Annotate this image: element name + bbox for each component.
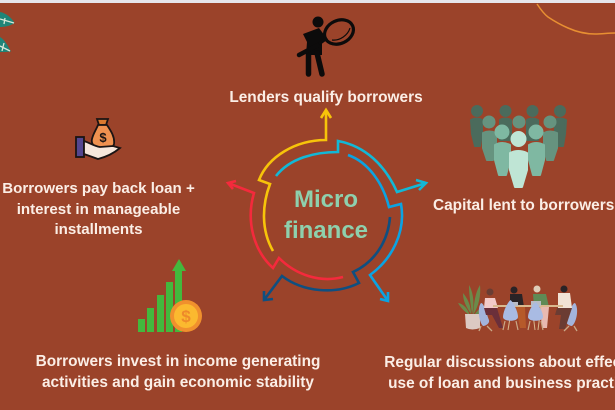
icon: bar chart with coin: $	[181, 307, 191, 326]
text: borrowers pay back loan	[2, 180, 195, 238]
text: borrowers invest: Borrowers invest in income generating	[36, 353, 320, 370]
yellow arrow	[259, 110, 331, 251]
back chairs	[479, 303, 489, 326]
text: borrowers pay back loan: interest in manageable	[17, 200, 180, 218]
back row of people	[471, 106, 566, 146]
central title: micro finance: Micro	[294, 186, 358, 213]
icon: hand holding money bag: $	[99, 130, 107, 145]
text: borrowers invest	[36, 353, 320, 390]
icon: person with magnifying glass	[296, 16, 356, 77]
front row of people	[495, 126, 544, 175]
text: capital lent to borrowers: Capital lent to borrowers	[433, 197, 614, 214]
text: borrowers pay back loan: installments	[54, 221, 143, 238]
front chairs	[503, 300, 518, 321]
heading: lenders qualify borrowers: Lenders qualify borrowers	[229, 89, 423, 106]
middle row of people	[483, 116, 557, 160]
central title: micro finance: finance	[284, 217, 368, 244]
icon: decorative teal leaves	[0, 12, 14, 52]
laptops	[509, 301, 541, 306]
light blue arrow	[348, 155, 402, 301]
pot	[465, 314, 480, 330]
text: borrowers invest: activities and gain economic stability	[42, 374, 314, 390]
icon: group of people	[470, 105, 567, 188]
dark blue arrow	[264, 217, 390, 300]
central title: micro finance	[284, 186, 368, 244]
decorative orange curve	[536, 4, 615, 35]
red arrow	[228, 181, 343, 279]
table	[493, 305, 563, 307]
plant	[458, 285, 484, 316]
text: borrowers pay back loan: Borrowers pay back loan +	[2, 180, 195, 197]
centre person	[510, 132, 527, 187]
people	[484, 286, 572, 329]
cyan arrow	[276, 141, 426, 192]
icon: team meeting at table	[458, 285, 578, 332]
icon: bar chart with coin	[138, 259, 202, 332]
icon: hand holding money bag	[75, 118, 122, 160]
text: regular discussions	[384, 354, 615, 392]
